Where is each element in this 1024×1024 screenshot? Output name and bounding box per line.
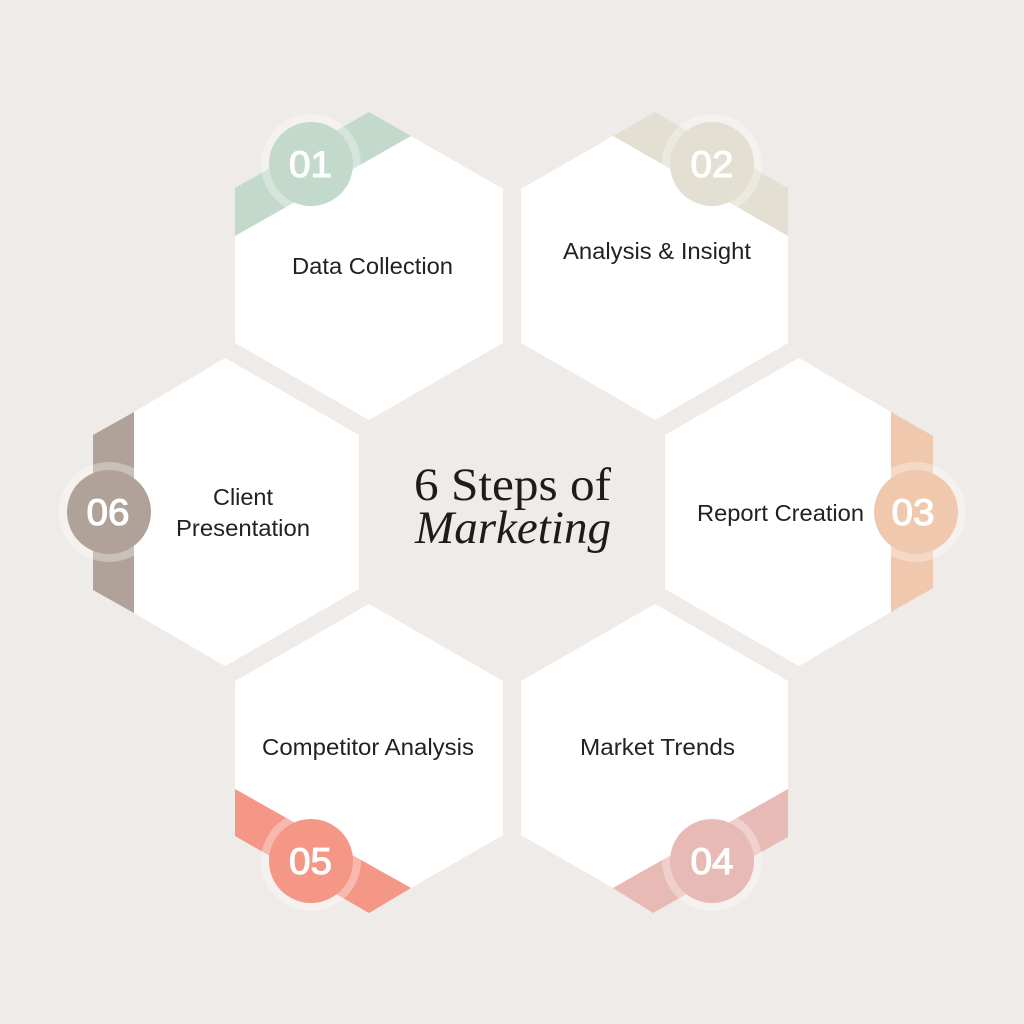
label: Data Collection: Data Collection — [292, 253, 453, 279]
ribbon: step 04 — [613, 789, 788, 913]
badge: 05 — [261, 811, 361, 911]
badge: 01: 01 — [289, 144, 332, 185]
badge: 06 — [59, 462, 159, 562]
badge: 01 — [261, 114, 361, 214]
badge: 02: 02 — [690, 144, 734, 185]
badge: 03: 03 — [892, 492, 934, 533]
panel: step 02 Analysis & Insight — [521, 112, 788, 420]
ribbon: step 02 — [613, 112, 788, 236]
title: Marketing — [414, 502, 611, 554]
panel: step 05 Competitor Analysis — [235, 604, 503, 913]
panel: step 03 Report Creation — [665, 358, 966, 666]
title: 6 Steps of — [414, 459, 611, 511]
ribbon: step 03 — [891, 412, 933, 612]
ribbon: step 05 — [235, 789, 411, 913]
ribbon: step 01 — [235, 112, 411, 236]
badge: 04: 04 — [690, 841, 734, 882]
ribbon: step 06 — [93, 412, 134, 613]
badge: 06: 06 — [86, 492, 130, 533]
badge: 03 — [866, 462, 966, 562]
title — [414, 459, 611, 554]
label: Client Presentation: Presentation — [176, 515, 310, 541]
panel: step 04 Market Trends — [521, 604, 788, 913]
label: Analysis & Insight: Analysis & Insight — [563, 238, 751, 264]
badge: 04 — [662, 811, 762, 911]
badge: 02 — [662, 114, 762, 214]
label: Client Presentation: Client — [213, 484, 273, 510]
label: Competitor Analysis: Competitor Analysis — [262, 734, 474, 760]
badge: 05: 05 — [289, 841, 332, 882]
panel: step 06 Client Presentation — [59, 358, 359, 666]
panel: step 01 Data Collection — [235, 112, 503, 420]
label: Market Trends: Market Trends — [580, 734, 735, 760]
label: Report Creation: Report Creation — [697, 500, 864, 526]
